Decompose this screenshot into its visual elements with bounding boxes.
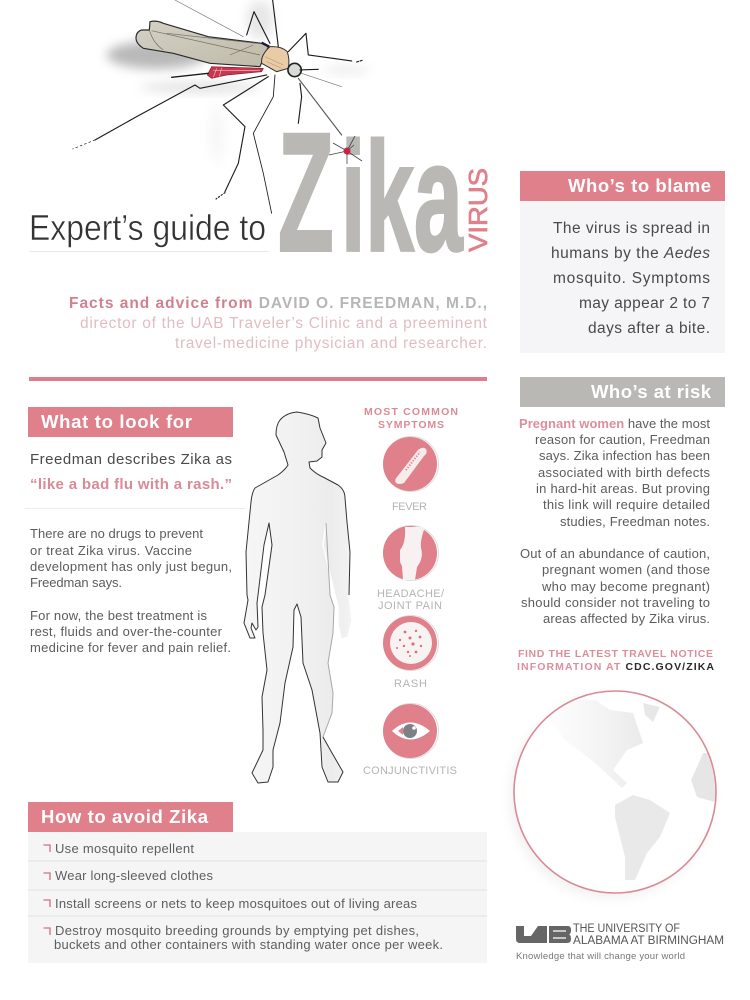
quote [25,451,245,509]
intro text: Facts and advice from DAVID O. FREEDMAN, M.D., [69,295,487,312]
item: long sleeves: Wear long-sleeved clothes [55,868,214,883]
mosquito abdomen [207,67,263,78]
mosquito thorax [262,47,289,72]
panel: what to look for [25,407,245,655]
risk text: says. Zika infection has been [539,448,710,463]
heading: how to avoid zika: How to avoid Zika [41,806,209,827]
item: use repellent: Use mosquito repellent [55,841,194,856]
title: Zika [278,97,463,287]
body text: There are no drugs to prevent [30,526,203,541]
icon: eye [383,704,438,758]
title: VIRUS: VIRUS [463,168,493,252]
panel: how to avoid zika [28,802,487,963]
body text [30,526,232,655]
globe [509,691,718,899]
risk text: this link will require detailed [543,497,710,512]
risk text [519,416,710,626]
link text: INFORMATION AT CDC.GOV/ZIKA [517,661,714,673]
risk text: pregnant women (and those [542,562,710,577]
label: headache/joint pain: HEADACHE/ [377,588,445,600]
panel: most common symptoms [363,406,458,777]
intro text: travel-medicine physician and researcher. [175,335,487,352]
heading: what to look for [28,407,233,437]
heading: what to look for: What to look for [41,411,192,432]
blame text: mosquito. Symptoms [553,270,710,287]
heading: who's at risk [520,377,725,407]
label: headache/joint pain: JOINT PAIN [378,600,442,612]
item: destroy breeding grounds [44,923,443,952]
mosquito head [288,63,301,77]
risk text: Pregnant women have the most [519,416,710,431]
heading: how to avoid zika [28,802,233,832]
icon: rash [383,616,438,670]
panel: who's to blame [520,171,725,353]
body text: or treat Zika virus. Vaccine [30,543,192,558]
label: fever: FEVER [392,501,427,513]
link text [517,648,714,673]
logo: UAB: ALABAMA AT BIRMINGHAM [573,935,724,947]
heading: most common symptoms [364,406,458,431]
blame text: may appear 2 to 7 [579,295,710,312]
continents [585,700,715,880]
quote: “like a bad flu with a rash.” [30,476,232,493]
item: destroy breeding grounds: buckets and other containers with standing water once per week. [54,937,443,952]
label: headache/joint pain [377,588,445,612]
icon: knee joint [383,526,438,580]
bite mark [329,136,362,164]
globe ring [514,691,716,893]
item: destroy breeding grounds: Destroy mosquito breeding grounds by emptying pet dishes, [55,923,419,938]
title: Expert's guide to: Expert’s guide to [29,207,266,248]
body text: rest, fluids and over-the-counter [30,624,223,639]
intro text [69,295,488,352]
intro text: director of the UAB Traveler’s Clinic and a preeminent [80,315,488,332]
icon: fever thermometer [383,436,438,492]
risk text: Out of an abundance of caution, [520,546,710,561]
risk text: associated with birth defects [538,465,710,480]
UAB mark [516,926,571,943]
risk text: who may become pregnant) [541,579,710,594]
body text: medicine for fever and pain relief. [30,640,231,655]
logo: UAB: THE UNIVERSITY OF [573,923,680,935]
risk text: studies, Freedman notes. [560,514,710,529]
illustration: mosquito [73,0,370,213]
risk text: should consider not traveling to [521,595,710,610]
mosquito legs [73,0,363,213]
body text: Freedman says. [30,575,122,590]
logo: UAB: Knowledge that will change your world [516,951,685,962]
blame text [551,220,710,337]
checklist background [28,832,487,963]
risk text: areas affected by Zika virus. [543,611,710,626]
label: rash: RASH [394,678,427,690]
blame text: days after a bite. [588,320,710,337]
panel: who's at risk [517,377,725,673]
heading: who's to blame: Who’s to blame [568,175,711,196]
title: Zika: ika [341,110,463,284]
mosquito wings [136,21,268,67]
quote: Freedman describes Zika as [30,451,232,468]
blame text: humans by the Aedes [551,245,710,262]
logo: UAB [516,923,724,962]
link text: FIND THE LATEST TRAVEL NOTICE [518,648,713,660]
body text: development has only just begun, [30,559,232,574]
heading: who's at risk: Who’s at risk [591,381,712,402]
heading: most common symptoms: SYMPTOMS [378,419,444,431]
body text: For now, the best treatment is [30,608,208,623]
label: conjunctivitis: CONJUNCTIVITIS [363,765,457,777]
heading: who's to blame [520,171,725,201]
title: Zika: Z [278,97,334,287]
item: screens or nets: Install screens or nets to keep mosquitoes out of living areas [55,896,418,911]
risk text: reason for caution, Freedman [535,432,710,447]
mosquito shadow [107,0,370,163]
risk text: in hard-hit areas. But proving [536,481,710,496]
heading: most common symptoms: MOST COMMON [364,406,458,418]
blame text: The virus is spread in [553,220,710,237]
figure: human body [244,412,352,783]
